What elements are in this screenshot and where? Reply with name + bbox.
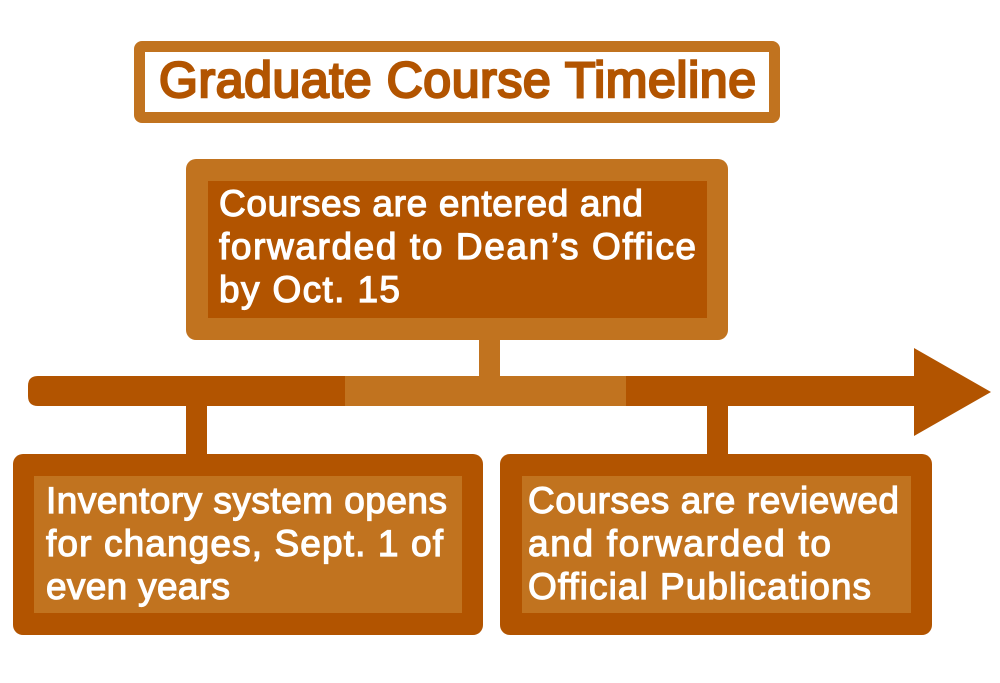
text: courses reviewed: Official Publications bbox=[528, 566, 871, 607]
text: courses entered bbox=[219, 183, 696, 310]
timeline arrow bbox=[28, 348, 991, 436]
panel: courses reviewed bbox=[500, 454, 932, 635]
text: inventory system: for changes, Sept. 1 of bbox=[46, 523, 444, 564]
text: courses entered: Courses are entered and bbox=[219, 183, 643, 224]
connector: timeline to right box bbox=[707, 406, 728, 454]
title box bbox=[134, 41, 780, 123]
panel: inventory system bbox=[13, 454, 483, 635]
text: courses reviewed: Courses are reviewed bbox=[528, 480, 899, 521]
connector: timeline to left box bbox=[186, 406, 207, 454]
connector: top box to timeline bbox=[479, 340, 500, 376]
panel: courses entered bbox=[186, 159, 728, 340]
text: inventory system: even years bbox=[46, 566, 230, 607]
title: Graduate Course Timeline bbox=[159, 52, 756, 108]
text: courses reviewed bbox=[528, 480, 899, 607]
text: inventory system bbox=[46, 480, 447, 607]
text: courses entered: forwarded to Dean’s Office bbox=[219, 226, 696, 267]
text: courses reviewed: and forwarded to bbox=[528, 523, 831, 564]
text: courses entered: by Oct. 15 bbox=[219, 269, 400, 310]
text: inventory system: Inventory system opens bbox=[46, 480, 447, 521]
